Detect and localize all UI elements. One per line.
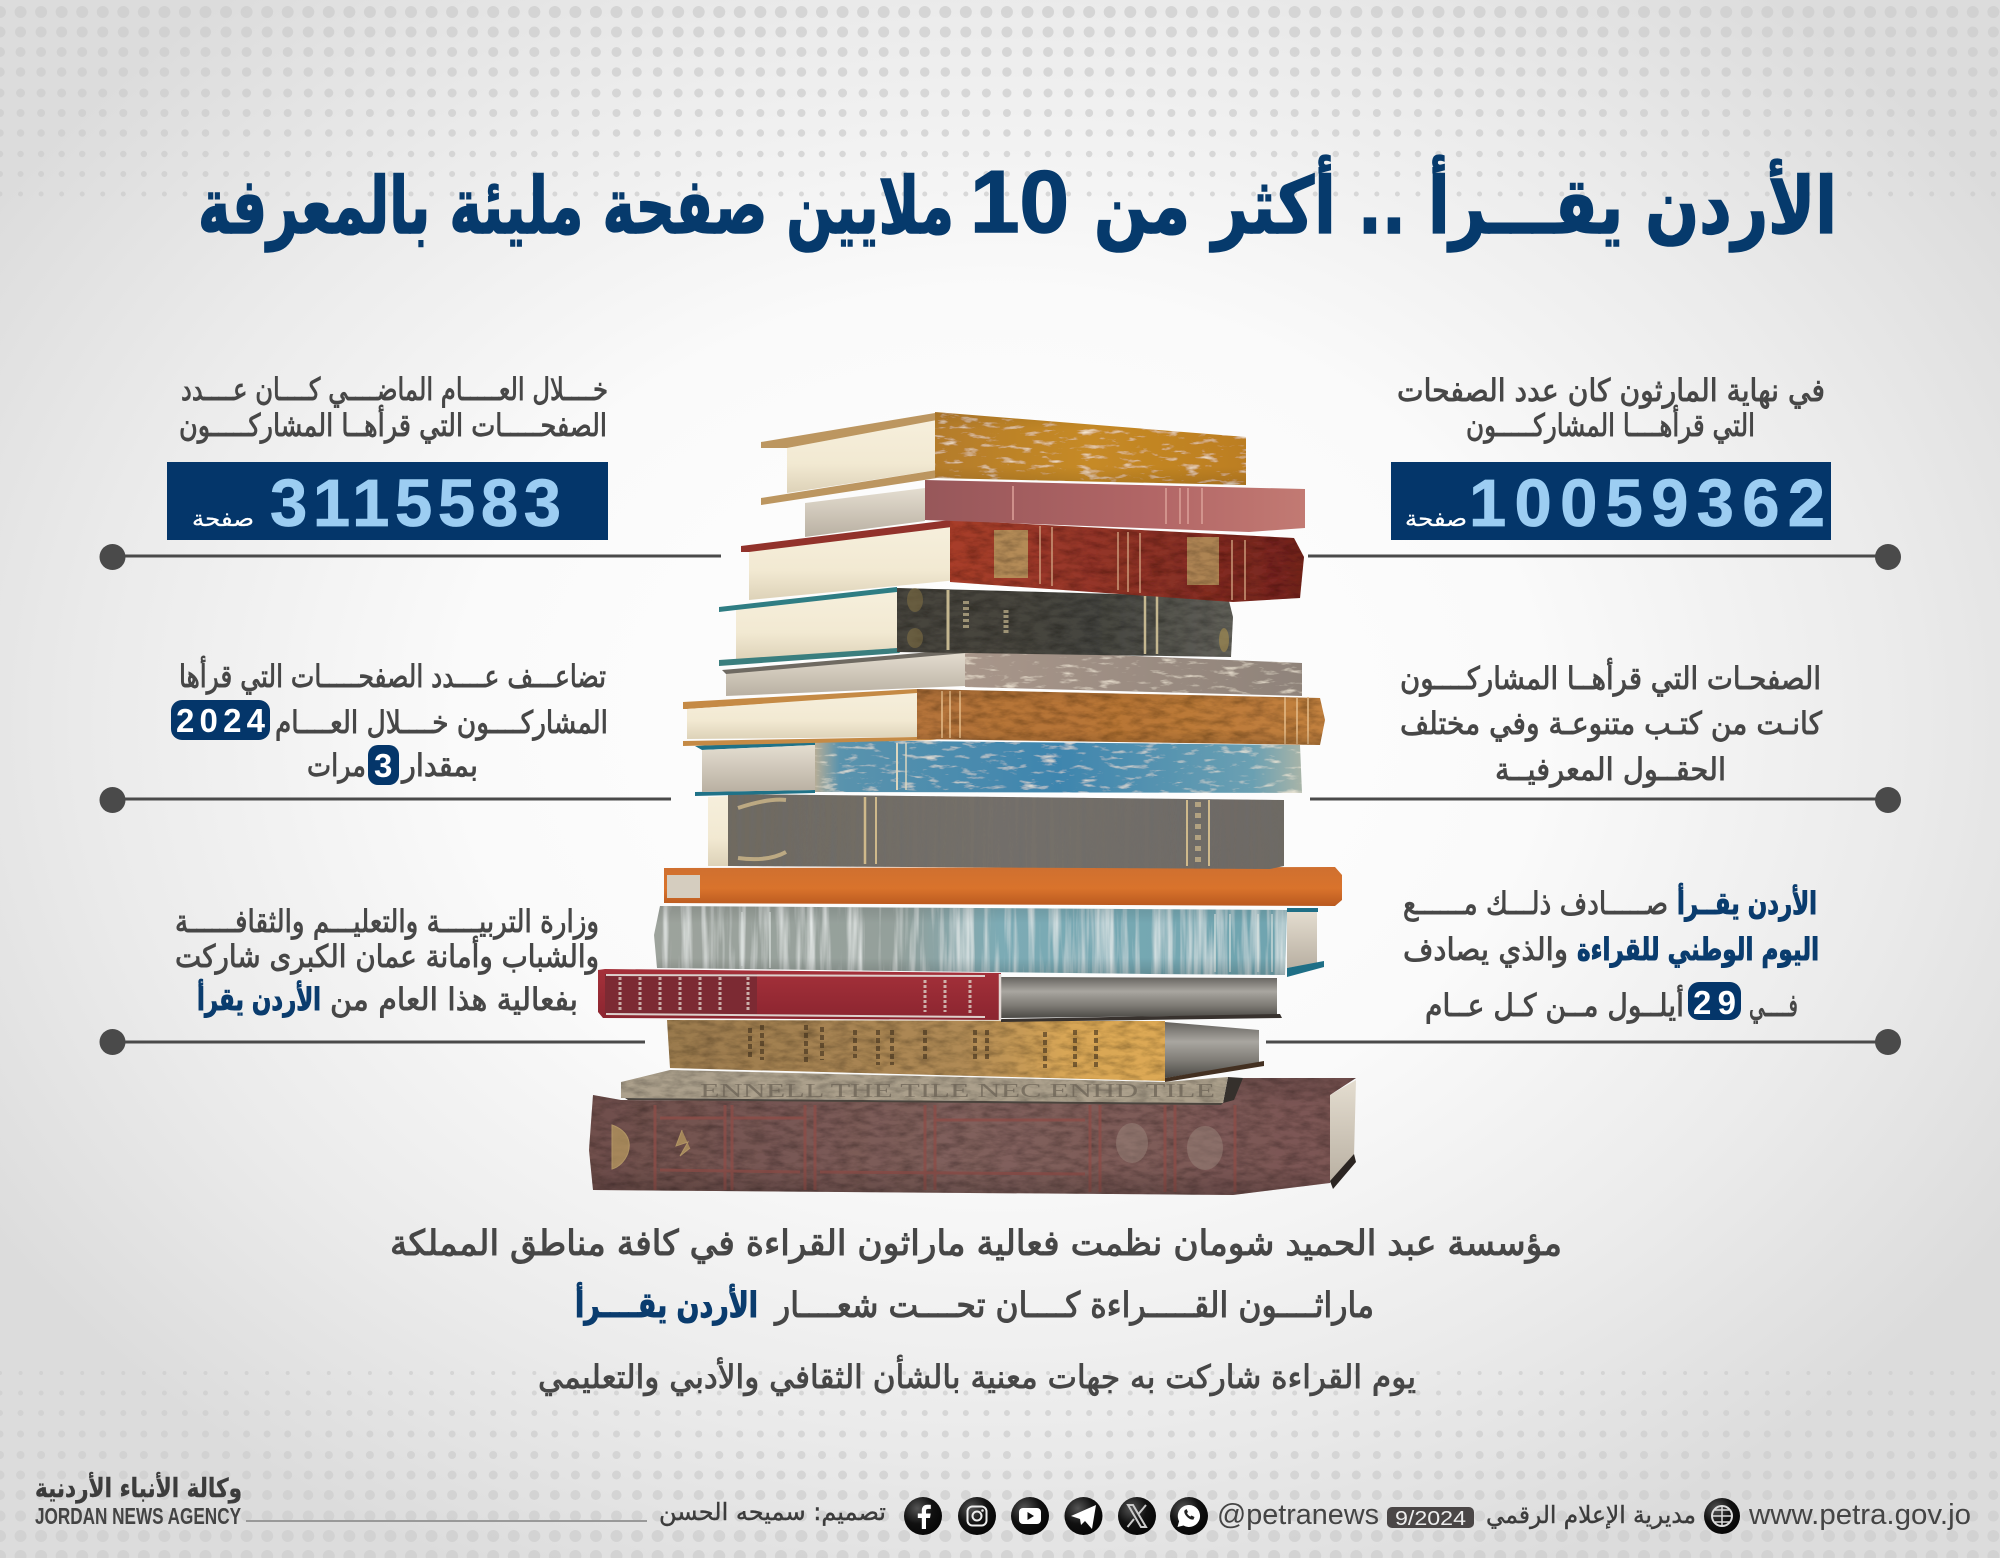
icon: telegram [1064, 1497, 1102, 1535]
panel: end of marathon pages [1308, 373, 1901, 570]
book: large brown base [589, 1078, 1356, 1195]
panel: diverse books [1310, 658, 1901, 813]
text: bottom summary: يوم القراءة شاركت به جهات معنية بالشأن الثقافي والأدبي والتعليمي [538, 1355, 1416, 1396]
text: institutions: وزارة التربيـــــة والتعليـــم والثقافــــــة [175, 904, 599, 940]
text: diverse books: الصفحـات التي قرأهــا المشاركــــون [1400, 658, 1821, 697]
number box 10059362: 10059362 [1469, 466, 1825, 541]
text: diverse books: كانـت من كتـب متنوعـة وفي مختلف [1400, 706, 1822, 742]
logo: Jordan News Agency: JORDAN NEWS AGENCY [35, 1503, 241, 1529]
text: national reading day: فــــي [1749, 988, 1798, 1024]
text: pages tripled [179, 656, 608, 784]
text: bottom summary: مؤسسة عبد الحميد شومان نظمت فعالية ماراثون القراءة في كافة مناطق المملكة [390, 1224, 1562, 1264]
text: end of marathon: في نهاية المارثون كان عدد الصفحات [1397, 373, 1825, 409]
text: institutions: بفعالية هذا العام من [330, 982, 578, 1018]
text: diverse books: الحقــول المعرفيــة [1495, 752, 1726, 788]
badge: date 9/2024 [1387, 1507, 1474, 1530]
leader line with dot [100, 544, 721, 570]
badge 3 [368, 745, 399, 785]
panel: national reading day [1266, 883, 1901, 1055]
text: institutions: والشباب وأمانة عمان الكبرى شاركت [175, 936, 599, 975]
book: beige with lettering: ENNELL THE TILE NEC ENHD TILE [700, 1080, 1215, 1102]
text: previous year description: خــــلال العـــــام الماضــــي كــــان عــــدد [181, 372, 608, 408]
text: national reading day [1403, 883, 1819, 1024]
badge 29: 29 [1693, 984, 1736, 1021]
number box 3115583 [167, 462, 608, 541]
book: rose [805, 480, 1305, 537]
text: diverse books [1400, 658, 1822, 788]
number box 10059362: صفحة [1405, 507, 1467, 532]
dot pattern: top [0, 12, 2000, 194]
text: bottom summary: ماراثــــون القـــــراءة كــــان تحــــت شعــــار [773, 1286, 1374, 1326]
panel: participating institutions [100, 904, 645, 1055]
text: pages tripled: تضاعـــف عــــدد الصفحـــــات التي قرأها [179, 656, 606, 695]
text: pages tripled: المشاركــــون خــــلال العــــام [275, 705, 608, 741]
text: institutions: الأردن يقرأ [197, 979, 321, 1018]
text: previous year description [179, 372, 608, 444]
number box 3115583: صفحة [192, 507, 254, 532]
panel: previous year pages [100, 372, 721, 570]
icon: youtube [1011, 1497, 1049, 1535]
icon: whatsapp [1170, 1497, 1208, 1535]
book: dark grey with gold lines [719, 587, 1233, 666]
icon: globe [1704, 1498, 1740, 1534]
logo: Jordan News Agency [35, 1472, 242, 1529]
book: beige with lettering [621, 1070, 1243, 1105]
panel: pages tripled [100, 656, 671, 813]
book: ochre top [761, 412, 1246, 505]
text: previous year description: الصفحـــــات التي قرأهــا المشاركـــــون [179, 405, 607, 444]
book: red with gold ornaments [741, 520, 1304, 602]
text: pages tripled: بمقدار [400, 748, 478, 784]
book: grey gold bands [708, 794, 1284, 869]
icon: facebook [904, 1497, 942, 1535]
text: national reading day: صـــــادف ذلـــك مــــــع [1403, 886, 1668, 922]
book: dark red with grey page edge [598, 969, 1282, 1022]
text: end of marathon: التي قرأهــــا المشاركـــــون [1466, 405, 1755, 444]
text: national reading day: الأردن يقــرأ [1677, 883, 1817, 922]
title: 10 [970, 152, 1069, 251]
text: website: www.petra.gov.jo [1748, 1499, 1971, 1531]
book: tan leather [683, 689, 1325, 746]
leader line with dot [1308, 544, 1901, 570]
icon: instagram [958, 1497, 996, 1535]
text: bottom summary [390, 1224, 1562, 1396]
logo: Jordan News Agency: وكالة الأنباء الأردنية [35, 1472, 242, 1504]
text: pages tripled: مرات [307, 748, 366, 784]
leader line with dot [1310, 787, 1901, 813]
badge: date 9/2024: 9/2024 [1395, 1508, 1466, 1530]
text: national reading day: والذي يصادف [1403, 932, 1568, 968]
dot pattern: bottom [0, 1373, 2000, 1556]
leader line with dot [100, 787, 671, 813]
text: digital media directorate: مديرية الإعلام الرقمي [1486, 1501, 1696, 1529]
icon: X [1118, 1497, 1156, 1535]
book: teal grey [654, 906, 1324, 977]
title [198, 152, 1837, 252]
social icons [904, 1497, 1208, 1535]
text: bottom summary: الأردن يقــــرأ [575, 1282, 758, 1326]
number box 3115583: 3115583 [270, 466, 561, 541]
text: institutions [175, 904, 599, 1018]
book: blue mottled [695, 740, 1302, 796]
text: national reading day: أيلــول مــن كـل عــام [1425, 985, 1684, 1024]
book: ochre with dark script [667, 1020, 1264, 1082]
book: orange thin [664, 867, 1342, 906]
book: grey-beige worn [722, 649, 1302, 696]
title: ملايين صفحة مليئة بالمعرفة [198, 162, 954, 252]
text: designer credit: تصميم: سميحه الحسن [659, 1498, 886, 1526]
text: end of marathon [1397, 373, 1825, 444]
badge 2024: 2024 [176, 702, 266, 739]
illustration: stack of old books [589, 412, 1356, 1195]
text: social handle: @petranews [1217, 1499, 1379, 1531]
badge 3: 3 [374, 747, 392, 784]
text: national reading day: اليوم الوطني للقراءة [1577, 932, 1819, 968]
title: الأردن يقـــرأ .. أكثر من [1094, 155, 1837, 252]
leader line with dot [1266, 1029, 1901, 1055]
leader line with dot [100, 1029, 645, 1055]
